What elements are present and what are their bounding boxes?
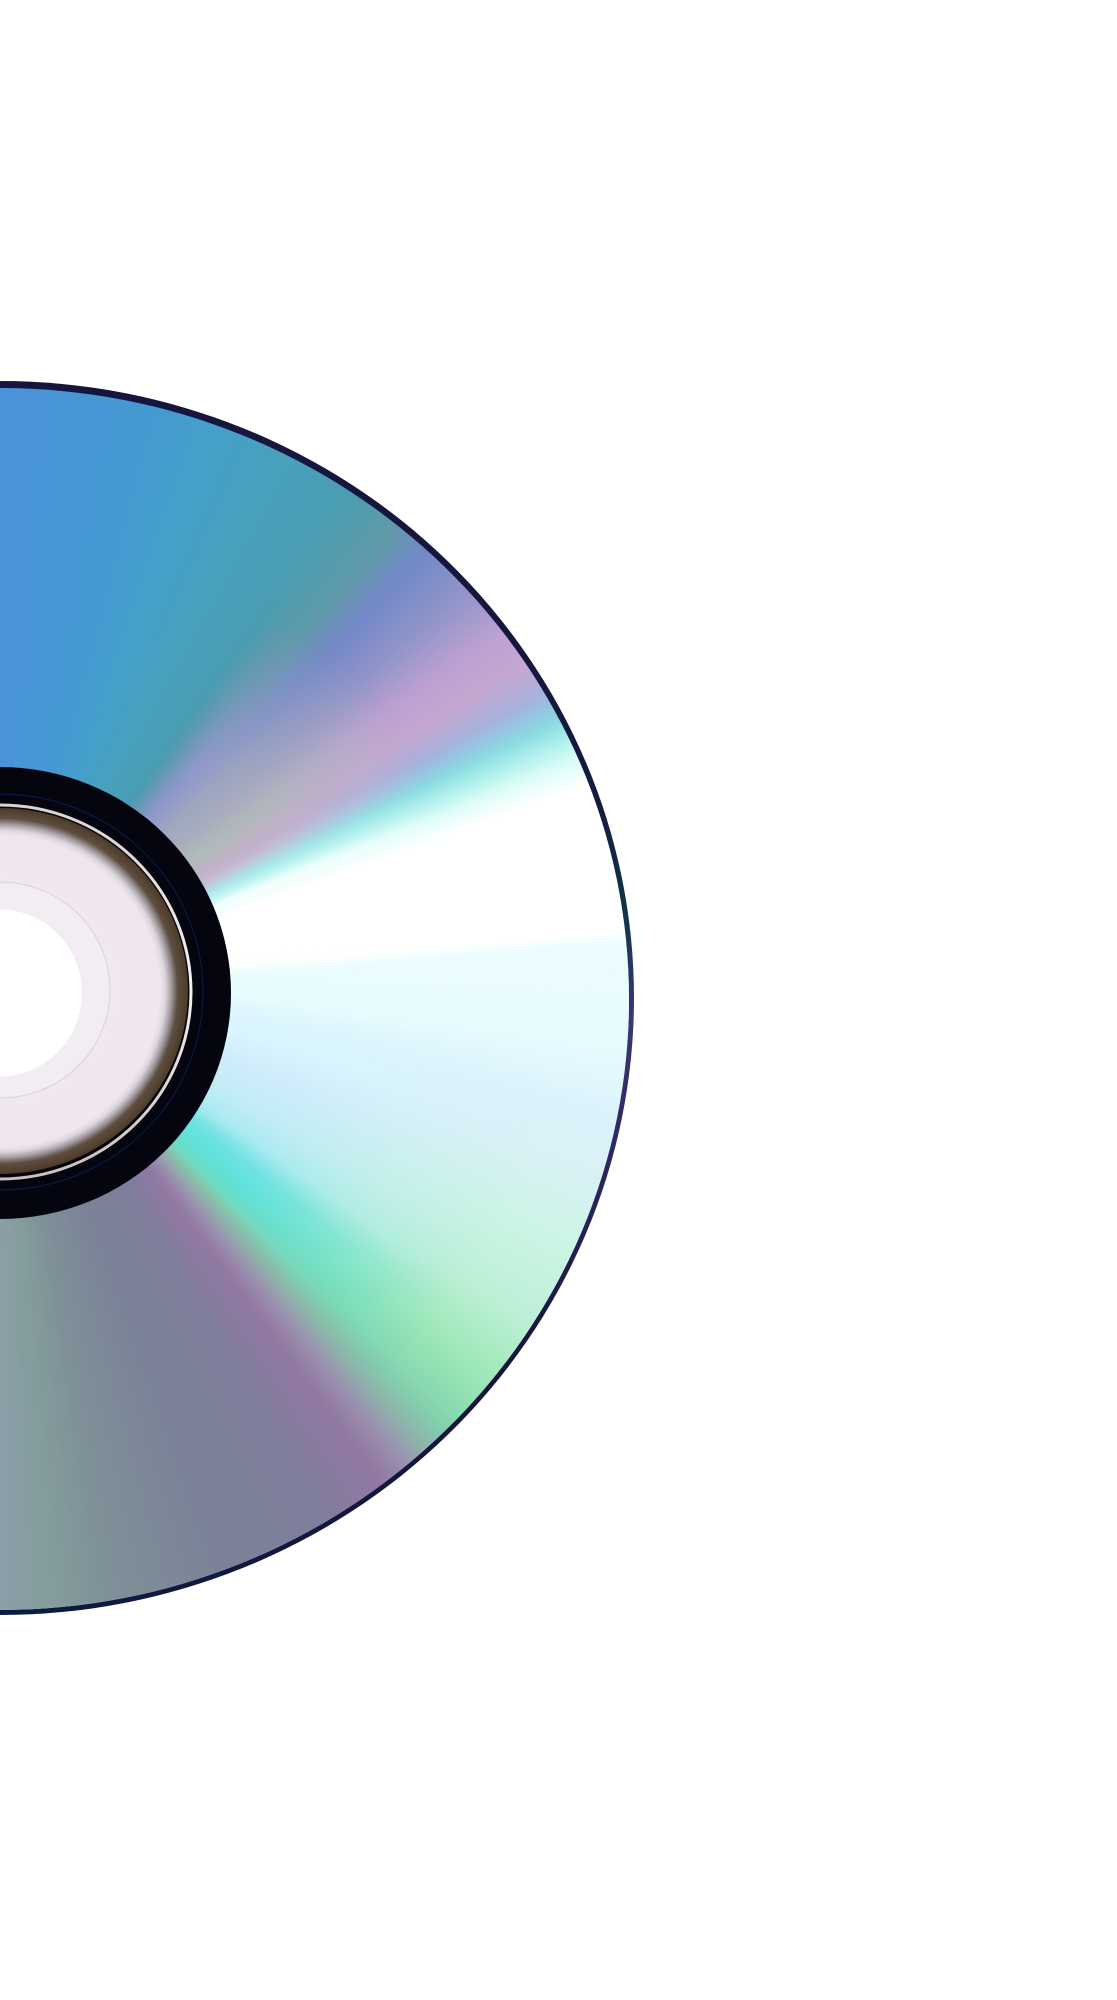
clamping area — [0, 808, 188, 1174]
cyan band near hub — [170, 1048, 416, 1321]
iridescent disc surface, lower bands — [0, 968, 629, 1610]
compact disc — [0, 381, 634, 1615]
center hole — [0, 910, 82, 1076]
inner rainbow bands near hub — [132, 650, 396, 910]
faint inner ring — [0, 882, 110, 1098]
iridescent disc surface, upper bands — [0, 388, 629, 1610]
silver ring — [0, 805, 191, 1179]
black hub band — [0, 767, 231, 1219]
thin blue ring — [0, 794, 203, 1190]
disc outer rim — [0, 381, 634, 1615]
